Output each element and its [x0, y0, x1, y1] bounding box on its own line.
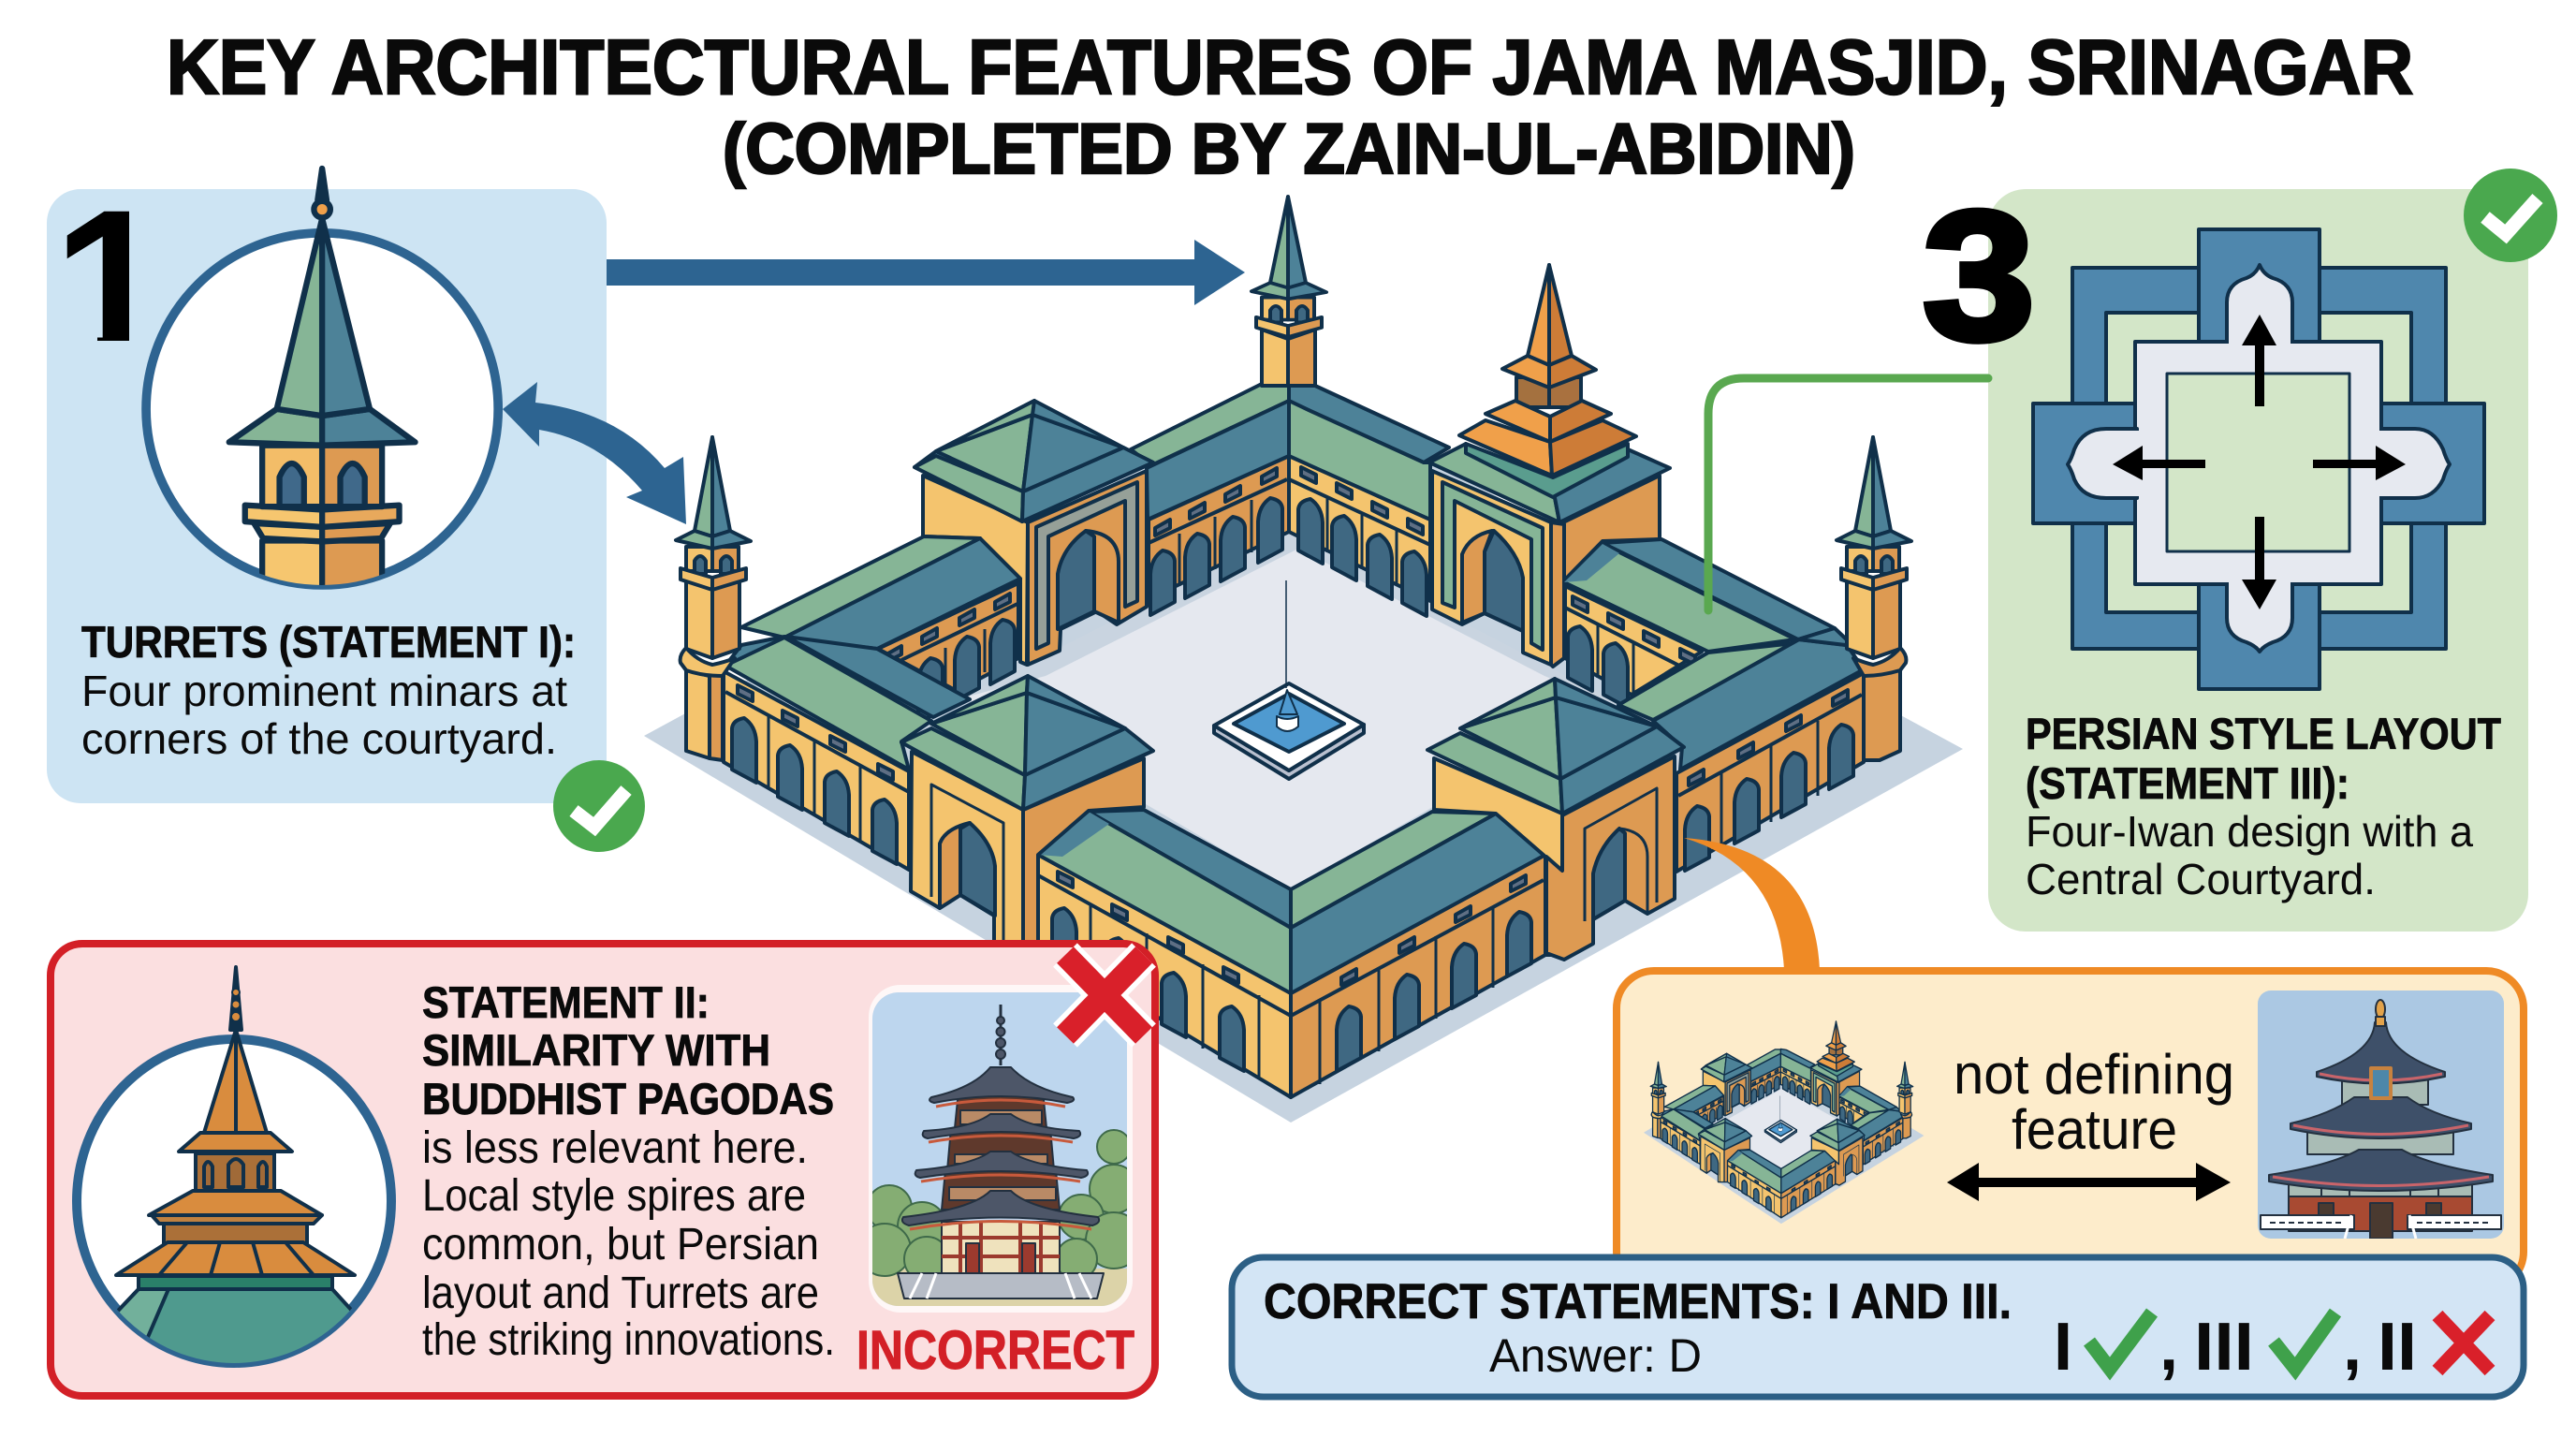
text: turrets: corners of the courtyard. [81, 714, 557, 763]
back right inner wing [1289, 382, 1449, 616]
icon: red cross [1065, 955, 1144, 1035]
text: statement II: the striking innovations. [422, 1315, 835, 1365]
illustration: isometric mosque [644, 197, 1963, 1123]
image: temple of heaven [2258, 990, 2504, 1239]
title [167, 23, 2413, 189]
connector: green line to panel 3 [1708, 378, 1988, 610]
text: statement II: common, but Persian [422, 1220, 819, 1269]
summary: tick and cross marks: II [2378, 1310, 2417, 1385]
right front wing [1653, 628, 1864, 872]
text: persian layout: PERSIAN STYLE LAYOUT [2026, 709, 2501, 758]
text: statement II: is less relevant here. [422, 1123, 808, 1173]
text: turrets: TURRETS (STATEMENT I): [81, 617, 576, 667]
arrow: curved double headed turret to minaret [503, 382, 686, 524]
arrow: double headed [1947, 1163, 2231, 1201]
panel: turrets statement I [47, 165, 607, 803]
arrow: panel 1 to top minaret [607, 240, 1245, 305]
connector: orange to comparison panel [1684, 838, 1820, 970]
text: statement II: STATEMENT II: [422, 977, 710, 1027]
text: statement II: BUDDHIST PAGODAS [422, 1074, 834, 1123]
panel: not defining feature comparison [1617, 971, 2524, 1289]
front right long wing [1291, 812, 1545, 1097]
gate tower back left [915, 401, 1153, 665]
left minaret [676, 437, 751, 760]
text: statement II: Local style spires are [422, 1171, 806, 1221]
summary: tick and cross marks: , [2159, 1310, 2178, 1385]
left wing back roof [725, 536, 1020, 723]
text: turrets: Four prominent minars at [81, 667, 567, 715]
title: (COMPLETED BY ZAIN-UL-ABIDIN) [723, 110, 1855, 189]
summary: tick and cross marks: I [2054, 1310, 2072, 1385]
summary: tick and cross marks: III [2194, 1310, 2254, 1385]
image: buddhist pagoda [858, 985, 1142, 1313]
icon: turret in circle [146, 169, 498, 595]
text: statement II: SIMILARITY WITH [422, 1025, 770, 1075]
text: not defining feature: feature [2012, 1098, 2177, 1161]
text: turrets [81, 617, 576, 763]
number 3: 3 [1923, 173, 2035, 378]
back left inner wing [1131, 384, 1289, 615]
text: correct statements: CORRECT STATEMENTS: I AND III. [1264, 1274, 2012, 1329]
summary: tick and cross marks: , [2343, 1310, 2362, 1385]
text: persian layout: (STATEMENT III): [2026, 758, 2349, 808]
title: KEY ARCHITECTURAL FEATURES OF JAMA MASJID, SRINAGAR [167, 23, 2413, 110]
panel: statement II incorrect [51, 944, 1155, 1396]
number 1: 1 [52, 165, 172, 405]
summary: tick and cross marks [2054, 1310, 2490, 1385]
arrows: four directions [2113, 315, 2406, 609]
text: persian layout: Four-Iwan design with a [2026, 807, 2473, 856]
ground shadow [644, 385, 1963, 1123]
right minaret [1837, 437, 1911, 760]
check badge: panel 3 [2464, 169, 2557, 262]
right wing back roof [1564, 539, 1835, 720]
icon: mini mosque [1644, 1021, 1924, 1224]
panel: correct statements answer [1232, 1257, 2524, 1397]
gate tower back right with orange pagoda spire [1429, 265, 1670, 667]
left front wing [724, 637, 970, 870]
check badge: panel 1 [553, 760, 645, 852]
top minaret [1251, 197, 1326, 386]
fountain [1214, 580, 1364, 779]
text: statement II [422, 977, 835, 1365]
gate tower front left [901, 676, 1153, 946]
icon: pagoda style spire in circle [72, 965, 396, 1368]
courtyard [961, 532, 1617, 889]
front left long wing [1038, 810, 1291, 1097]
icon: four-iwan plan [2033, 229, 2484, 689]
text: persian layout: Central Courtyard. [2026, 855, 2376, 903]
text: incorrect: INCORRECT [856, 1320, 1134, 1381]
text: correct statements: Answer: D [1489, 1329, 1702, 1382]
panel: persian layout statement III [1923, 173, 2528, 932]
text: statement II: layout and Turrets are [422, 1269, 819, 1318]
gate tower front right [1427, 679, 1684, 960]
text: persian layout [2026, 709, 2501, 903]
text: not defining feature [1954, 1043, 2234, 1161]
text: correct statements [1264, 1274, 2012, 1382]
text: not defining feature: not defining [1954, 1043, 2234, 1106]
